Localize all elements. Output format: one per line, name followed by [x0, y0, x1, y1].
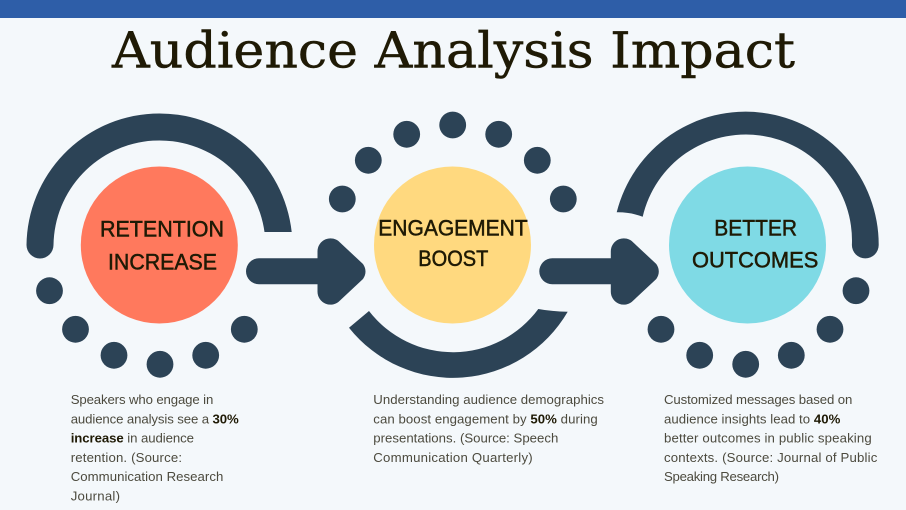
text: outcomes: Customized messages based on	[664, 392, 852, 407]
label: better outcomes: OUTCOMES	[692, 248, 818, 273]
text: engagement	[373, 392, 604, 465]
text: retention: Journal)	[71, 488, 120, 504]
arrow: engagement to outcomes	[539, 238, 659, 305]
text: engagement: presentations. (Source: Speech	[373, 431, 558, 446]
text: outcomes: contexts. (Source: Journal of Public	[664, 450, 878, 465]
text: engagement: can boost engagement by 50% during	[373, 411, 598, 426]
dots: engagement	[329, 112, 577, 212]
label: engagement boost: BOOST	[418, 246, 488, 271]
text: retention: Communication Research	[71, 469, 223, 484]
label: engagement boost	[378, 215, 528, 271]
text: engagement: Communication Quarterly)	[373, 450, 533, 465]
label: engagement boost: ENGAGEMENT	[378, 215, 528, 240]
arrow: retention to engagement	[246, 238, 366, 305]
label: retention increase: RETENTION	[100, 217, 224, 242]
label: retention increase	[100, 217, 224, 274]
circle: retention	[81, 166, 238, 324]
circle: outcomes	[669, 166, 826, 324]
text: retention: retention. (Source:	[71, 450, 182, 465]
arc: engagement	[349, 309, 568, 378]
text: engagement: Understanding audience demographics	[373, 392, 604, 407]
arc: retention	[26, 113, 292, 258]
text: retention	[71, 392, 239, 504]
text: outcomes: Speaking Research)	[664, 469, 779, 484]
panel: better outcomes	[617, 112, 879, 484]
text: retention: audience analysis see a 30%	[71, 411, 239, 426]
label: retention increase: INCREASE	[108, 249, 217, 274]
label: better outcomes: BETTER	[714, 215, 797, 240]
dots: retention	[36, 277, 258, 378]
panel: retention increase	[26, 113, 292, 504]
top bar	[0, 0, 906, 18]
text: retention: increase in audience	[71, 431, 194, 446]
arc: outcomes	[617, 112, 879, 258]
label: better outcomes	[692, 215, 818, 273]
text: outcomes: better outcomes in public speaking	[664, 431, 872, 446]
panel: engagement boost	[329, 112, 604, 465]
text: outcomes	[664, 392, 878, 484]
circle: engagement	[374, 166, 531, 324]
dots: outcomes	[648, 277, 869, 378]
text: outcomes: audience insights lead to 40%	[664, 411, 841, 426]
title: Audience Analysis Impact	[111, 22, 795, 80]
text: retention: Speakers who engage in	[71, 392, 213, 407]
